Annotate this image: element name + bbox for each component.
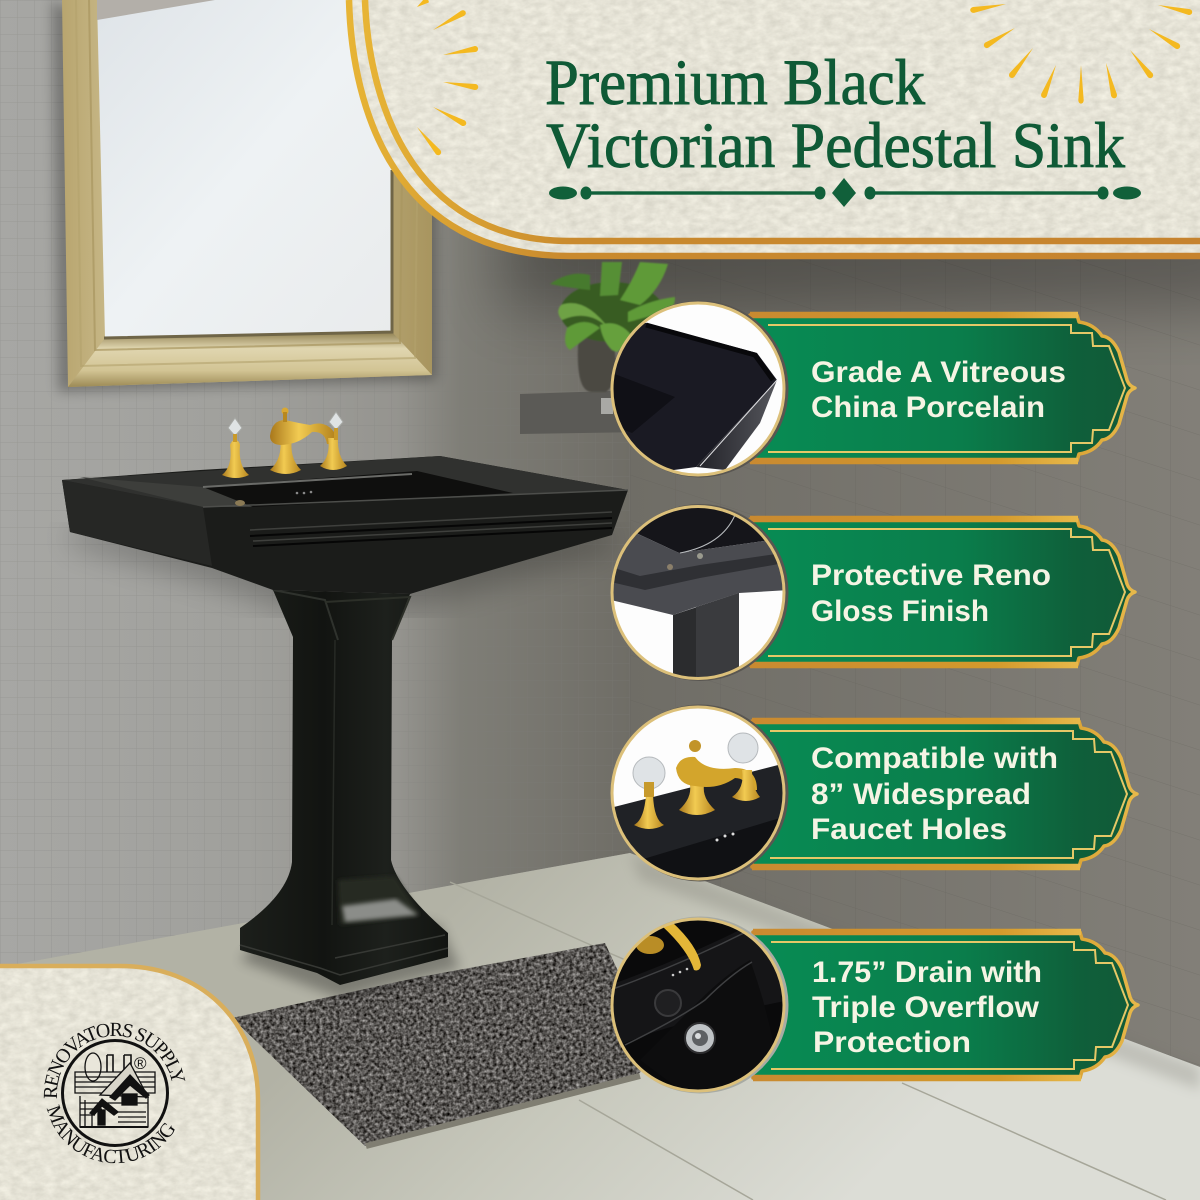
banner text: 1.75” Drain with xyxy=(812,956,1042,989)
basin body xyxy=(62,456,628,594)
wall mirror with gold frame xyxy=(52,0,436,392)
banner text: Gloss Finish xyxy=(811,595,989,628)
bath rug xyxy=(234,943,641,1149)
fern plant in pot xyxy=(550,262,675,392)
banner shape xyxy=(750,519,1135,665)
banner text: Grade A Vitreous xyxy=(811,356,1066,389)
sunburst rays right xyxy=(970,1,1193,104)
title text: Premium Black xyxy=(545,47,925,119)
banner shape xyxy=(750,315,1135,461)
sink shadow on wall xyxy=(70,530,612,610)
logo panel xyxy=(0,964,260,1200)
detail photo: porcelain corner xyxy=(610,302,788,478)
banner shape xyxy=(753,932,1138,1078)
banner shape xyxy=(752,721,1137,867)
gold widespread faucet xyxy=(222,408,347,478)
Renovators Supply Manufacturing seal xyxy=(44,1022,186,1164)
feature banner: faucet holes xyxy=(605,700,1137,890)
banner text: China Porcelain xyxy=(811,391,1045,424)
feature banner: drain xyxy=(605,910,1138,1100)
title text: Victorian Pedestal Sink xyxy=(546,110,1125,182)
banner text: 8” Widespread xyxy=(811,778,1031,811)
detail photo: faucet on sink xyxy=(610,704,788,882)
banner text: Protective Reno xyxy=(811,559,1051,592)
double gold border xyxy=(349,0,1200,256)
shelf xyxy=(520,390,640,434)
banner text: Triple Overflow xyxy=(812,991,1040,1024)
banner text: Compatible with xyxy=(811,742,1058,775)
feature banner: vitreous china xyxy=(600,300,1135,480)
ornamental divider xyxy=(549,178,1141,207)
detail photo: drain and overflow xyxy=(610,916,788,1094)
Renovators Supply Manufacturing seal: RENOVATORS SUPPLY xyxy=(44,1022,186,1098)
banner text: Faucet Holes xyxy=(811,813,1007,846)
house drawing xyxy=(75,1053,155,1127)
pedestal column xyxy=(240,590,460,998)
detail photo: gloss rim xyxy=(610,504,788,681)
sunburst rays left xyxy=(415,0,479,156)
title panel xyxy=(345,0,1200,262)
Renovators Supply Manufacturing seal: MANUFACTURING xyxy=(46,1104,175,1164)
feature banner: gloss finish xyxy=(600,500,1135,690)
registered mark: ® xyxy=(134,1054,147,1073)
black pedestal sink xyxy=(62,408,628,998)
banner text: Protection xyxy=(813,1026,971,1059)
